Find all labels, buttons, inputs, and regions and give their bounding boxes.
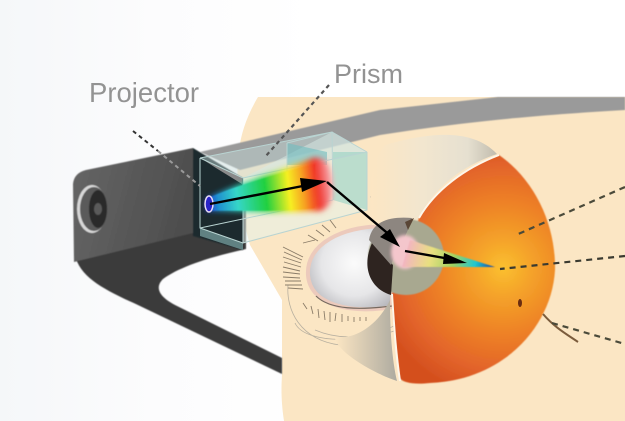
lens outer ring [77, 185, 107, 233]
dashed leader: retina upper [516, 187, 625, 235]
eye cutaway: sclera shell [371, 135, 497, 226]
optic nerve [543, 314, 578, 342]
eyeball white [308, 226, 392, 309]
label: Projector: Projector [89, 77, 199, 108]
housing: end face [193, 148, 243, 250]
dashed leader: optic nerve [552, 323, 625, 344]
skin: face [237, 97, 625, 421]
cut edge highlight [392, 155, 499, 381]
arrow: projector to prism [210, 178, 327, 204]
label: Prism: Prism [334, 59, 403, 89]
dashed leader: projector [133, 131, 158, 151]
light beam 2: converging [402, 240, 495, 267]
dashed leader: prism [265, 85, 329, 157]
macula spot [518, 299, 522, 307]
lens [89, 190, 107, 228]
projector source glow [205, 196, 213, 212]
eyelashes [283, 220, 366, 322]
glass block: light prism housing [200, 132, 367, 250]
arrow: prism to eye [327, 182, 400, 247]
frame: lower dark band [75, 210, 282, 374]
housing: front face [73, 148, 193, 262]
eye socket lines and eyelid [283, 196, 430, 345]
light beam 1: rainbow [206, 158, 333, 212]
arrow: lens to retina [405, 251, 467, 264]
lens and iris [367, 218, 444, 295]
temple arm: gray [200, 97, 625, 170]
retina: orange cutaway [392, 155, 555, 384]
projector housing [73, 148, 243, 262]
dashed leader: retina centre [500, 256, 625, 269]
dashed leader: projector inside housing [158, 151, 200, 186]
